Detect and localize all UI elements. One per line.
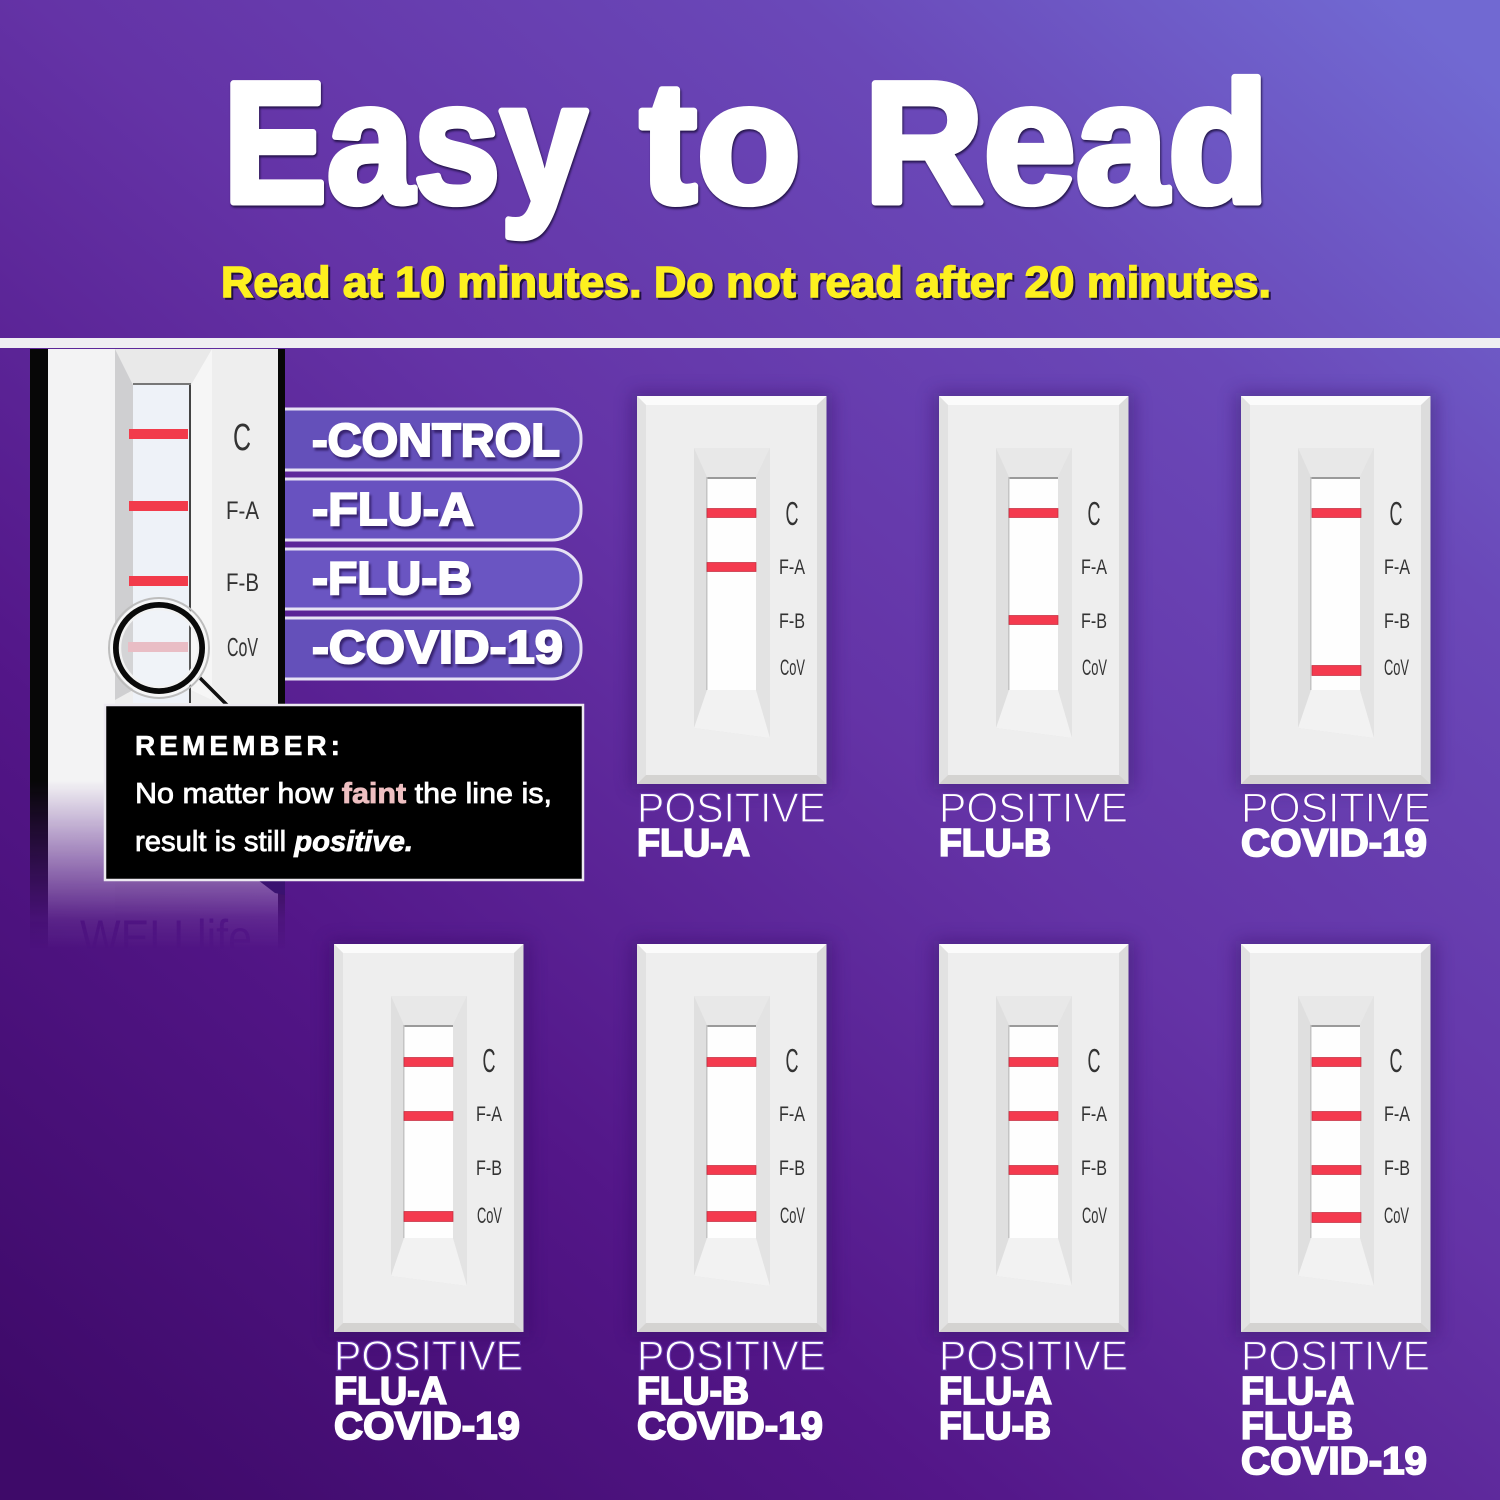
strip labels: C	[1088, 495, 1100, 532]
result caption: POSITIVE	[334, 1332, 523, 1379]
result caption	[939, 1332, 1128, 1448]
pill: flu-b: -FLU-B	[312, 552, 472, 604]
strip labels: F-B	[1384, 1157, 1410, 1180]
callout heading: REMEMBER:	[135, 730, 340, 761]
result caption: FLU-A	[334, 1370, 447, 1413]
panel: positive flu-a	[632, 393, 832, 865]
result caption: COVID-19	[334, 1405, 520, 1448]
result lines	[1009, 508, 1058, 624]
strip labels	[1081, 495, 1107, 680]
result caption: POSITIVE	[939, 784, 1128, 831]
callout text 2: result is still positive.	[135, 826, 413, 858]
device labels: F-B	[226, 569, 259, 597]
strip labels	[779, 495, 805, 680]
flu-b line	[129, 576, 188, 586]
strip labels: F-A	[1081, 1103, 1107, 1126]
result caption: POSITIVE	[637, 784, 826, 831]
test device close-up	[30, 349, 285, 966]
strip labels: F-A	[1384, 556, 1410, 579]
strip labels: C	[1390, 1042, 1402, 1079]
result caption: FLU-B	[939, 1405, 1051, 1448]
title	[223, 47, 1269, 239]
icon: magnifying glass	[109, 598, 236, 714]
header divider	[0, 338, 1500, 348]
result caption: FLU-A	[1241, 1370, 1354, 1413]
result lines	[1312, 508, 1361, 676]
pill: flu-a	[285, 479, 581, 540]
strip labels	[1384, 495, 1410, 680]
flu-a line	[129, 501, 188, 511]
result lines	[1009, 1058, 1058, 1174]
pill: flu-a: -FLU-A	[312, 483, 474, 535]
result caption: COVID-19	[637, 1405, 823, 1448]
callout text: No matter how faint the line is,	[135, 778, 552, 810]
strip labels: CoV	[1384, 655, 1409, 680]
callout: remember	[105, 705, 583, 895]
panel: positive flu-a flu-b covid-19	[1236, 941, 1436, 1483]
panel: positive flu-b covid-19	[632, 941, 832, 1448]
strip labels: F-A	[779, 1103, 805, 1126]
title: Easy	[223, 47, 587, 239]
result lines	[1312, 1058, 1361, 1222]
strip labels	[1384, 1042, 1410, 1228]
strip labels: CoV	[780, 1203, 805, 1228]
strip labels: F-B	[476, 1157, 502, 1180]
pill: control	[285, 409, 581, 470]
panel: positive flu-a flu-b	[934, 941, 1134, 1448]
strip labels: CoV	[477, 1203, 502, 1228]
strip labels: F-B	[1081, 610, 1107, 633]
result caption: POSITIVE	[1241, 1332, 1430, 1379]
title: to	[640, 47, 801, 239]
faint covid line	[128, 642, 188, 652]
brand text: WELLlife	[80, 910, 252, 966]
pill: control: -CONTROL	[312, 414, 560, 466]
result caption: POSITIVE	[1241, 784, 1431, 831]
result lines	[707, 508, 756, 572]
result caption: FLU-B	[637, 1370, 749, 1413]
test strip window	[133, 383, 191, 703]
strip labels	[476, 1042, 502, 1228]
strip labels: CoV	[1082, 1203, 1107, 1228]
title: Read	[864, 47, 1269, 239]
result caption: COVID-19	[1241, 1440, 1427, 1483]
strip labels: C	[1390, 495, 1402, 532]
strip labels: CoV	[1082, 655, 1107, 680]
strip labels: F-B	[779, 610, 805, 633]
strip labels: C	[786, 1042, 798, 1079]
strip labels	[1081, 1042, 1107, 1228]
device labels	[226, 417, 259, 662]
strip labels: F-A	[1384, 1103, 1410, 1126]
result caption	[334, 1332, 523, 1448]
pill: covid-19	[285, 618, 581, 679]
result caption	[1241, 784, 1431, 865]
result caption: COVID-19	[1241, 822, 1427, 865]
strip labels: C	[482, 1042, 496, 1079]
strip labels: C	[786, 495, 798, 532]
result caption	[637, 1332, 826, 1448]
strip labels: F-A	[779, 556, 805, 579]
device labels: F-A	[226, 497, 259, 525]
result caption: POSITIVE	[939, 1332, 1128, 1379]
strip labels	[779, 1042, 805, 1228]
result caption	[1241, 1332, 1430, 1483]
pill: flu-b	[285, 549, 581, 609]
result caption: POSITIVE	[637, 1332, 826, 1379]
strip labels: C	[1088, 1042, 1100, 1079]
strip labels: F-A	[476, 1103, 502, 1126]
result caption: FLU-A	[939, 1370, 1052, 1413]
control line	[129, 429, 188, 439]
panel: positive covid-19	[1236, 393, 1436, 865]
result caption: FLU-A	[637, 822, 750, 865]
panel: positive flu-a covid-19	[329, 941, 529, 1448]
strip labels: F-B	[779, 1157, 805, 1180]
result lines	[707, 1058, 756, 1222]
pill: covid-19: -COVID-19	[312, 621, 563, 673]
strip labels: F-B	[1081, 1157, 1107, 1180]
result caption: FLU-B	[939, 822, 1051, 865]
subtitle: Read at 10 minutes. Do not read after 20 minutes.	[221, 258, 1271, 307]
strip labels: CoV	[1384, 1203, 1409, 1228]
result lines	[404, 1058, 453, 1222]
strip labels: F-B	[1384, 610, 1410, 633]
result caption	[637, 784, 826, 865]
result caption: FLU-B	[1241, 1405, 1353, 1448]
device labels: C	[233, 417, 251, 459]
panel: positive flu-b	[934, 393, 1134, 865]
result caption	[939, 784, 1128, 865]
strip labels: F-A	[1081, 556, 1107, 579]
device labels: CoV	[227, 632, 258, 662]
strip labels: CoV	[780, 655, 805, 680]
